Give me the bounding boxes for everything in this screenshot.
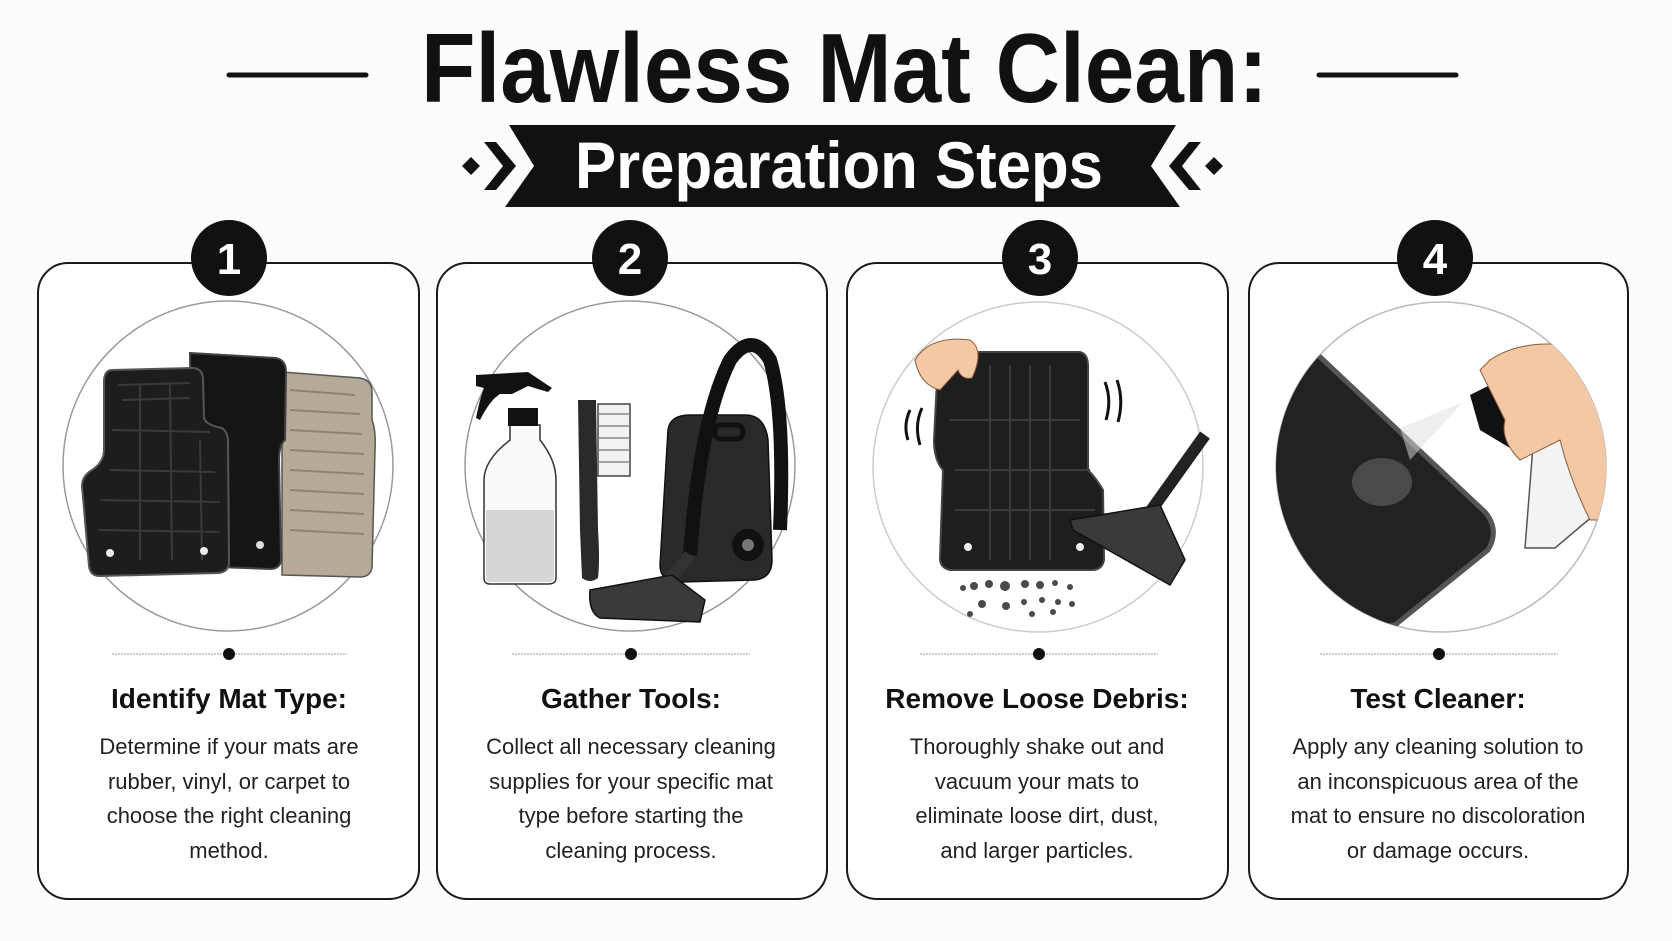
divider [512, 648, 750, 660]
badge 4: 4 [1423, 235, 1448, 284]
illustration: tools [465, 301, 795, 631]
body 1: Determine if your mats are [99, 734, 359, 759]
body 1: rubber, vinyl, or carpet to [108, 769, 350, 794]
body 4 [1291, 734, 1585, 863]
body 1: choose the right cleaning [107, 803, 351, 828]
divider [112, 648, 347, 660]
heading 4: Test Cleaner: [1350, 683, 1526, 714]
body 2: Collect all necessary cleaning [486, 734, 776, 759]
badge 1: 1 [217, 235, 241, 284]
body 1: method. [189, 838, 269, 863]
body 1 [99, 734, 359, 863]
body 2 [486, 734, 776, 863]
title: Flawless Mat Clean: [421, 13, 1268, 123]
heading 3: Remove Loose Debris: [885, 683, 1189, 714]
badge 2 [592, 220, 668, 296]
body 3: Thoroughly shake out and [910, 734, 1164, 759]
illustration: three mats [63, 301, 393, 631]
badge 3 [1002, 220, 1078, 296]
heading 2: Gather Tools: [541, 683, 721, 714]
body 4: or damage occurs. [1347, 838, 1529, 863]
panel 2: gather tools [437, 220, 827, 899]
subtitle banner [462, 125, 1223, 207]
body 3: vacuum your mats to [935, 769, 1139, 794]
subtitle banner: Preparation Steps [575, 128, 1103, 202]
heading 1: Identify Mat Type: [111, 683, 347, 714]
body 2: cleaning process. [545, 838, 717, 863]
panel 1: identify mat type [38, 220, 419, 899]
body 3: eliminate loose dirt, dust, [915, 803, 1159, 828]
panel 4: test cleaner [1249, 220, 1628, 899]
body 3 [910, 734, 1164, 863]
badge 2: 2 [618, 235, 642, 284]
illustration: shaking mat and vacuum [873, 302, 1205, 632]
badge 4 [1397, 220, 1473, 296]
divider [1320, 648, 1558, 660]
badge 1 [191, 220, 267, 296]
body 2: supplies for your specific mat [489, 769, 773, 794]
panel 3: remove loose debris [847, 220, 1228, 899]
divider [920, 648, 1158, 660]
body 4: mat to ensure no discoloration [1291, 803, 1585, 828]
body 4: an inconspicuous area of the [1297, 769, 1579, 794]
body 4: Apply any cleaning solution to [1292, 734, 1584, 759]
body 3: and larger particles. [940, 838, 1134, 863]
body 2: type before starting the [518, 803, 744, 828]
badge 3: 3 [1028, 235, 1052, 284]
illustration: spray test [1275, 301, 1607, 633]
